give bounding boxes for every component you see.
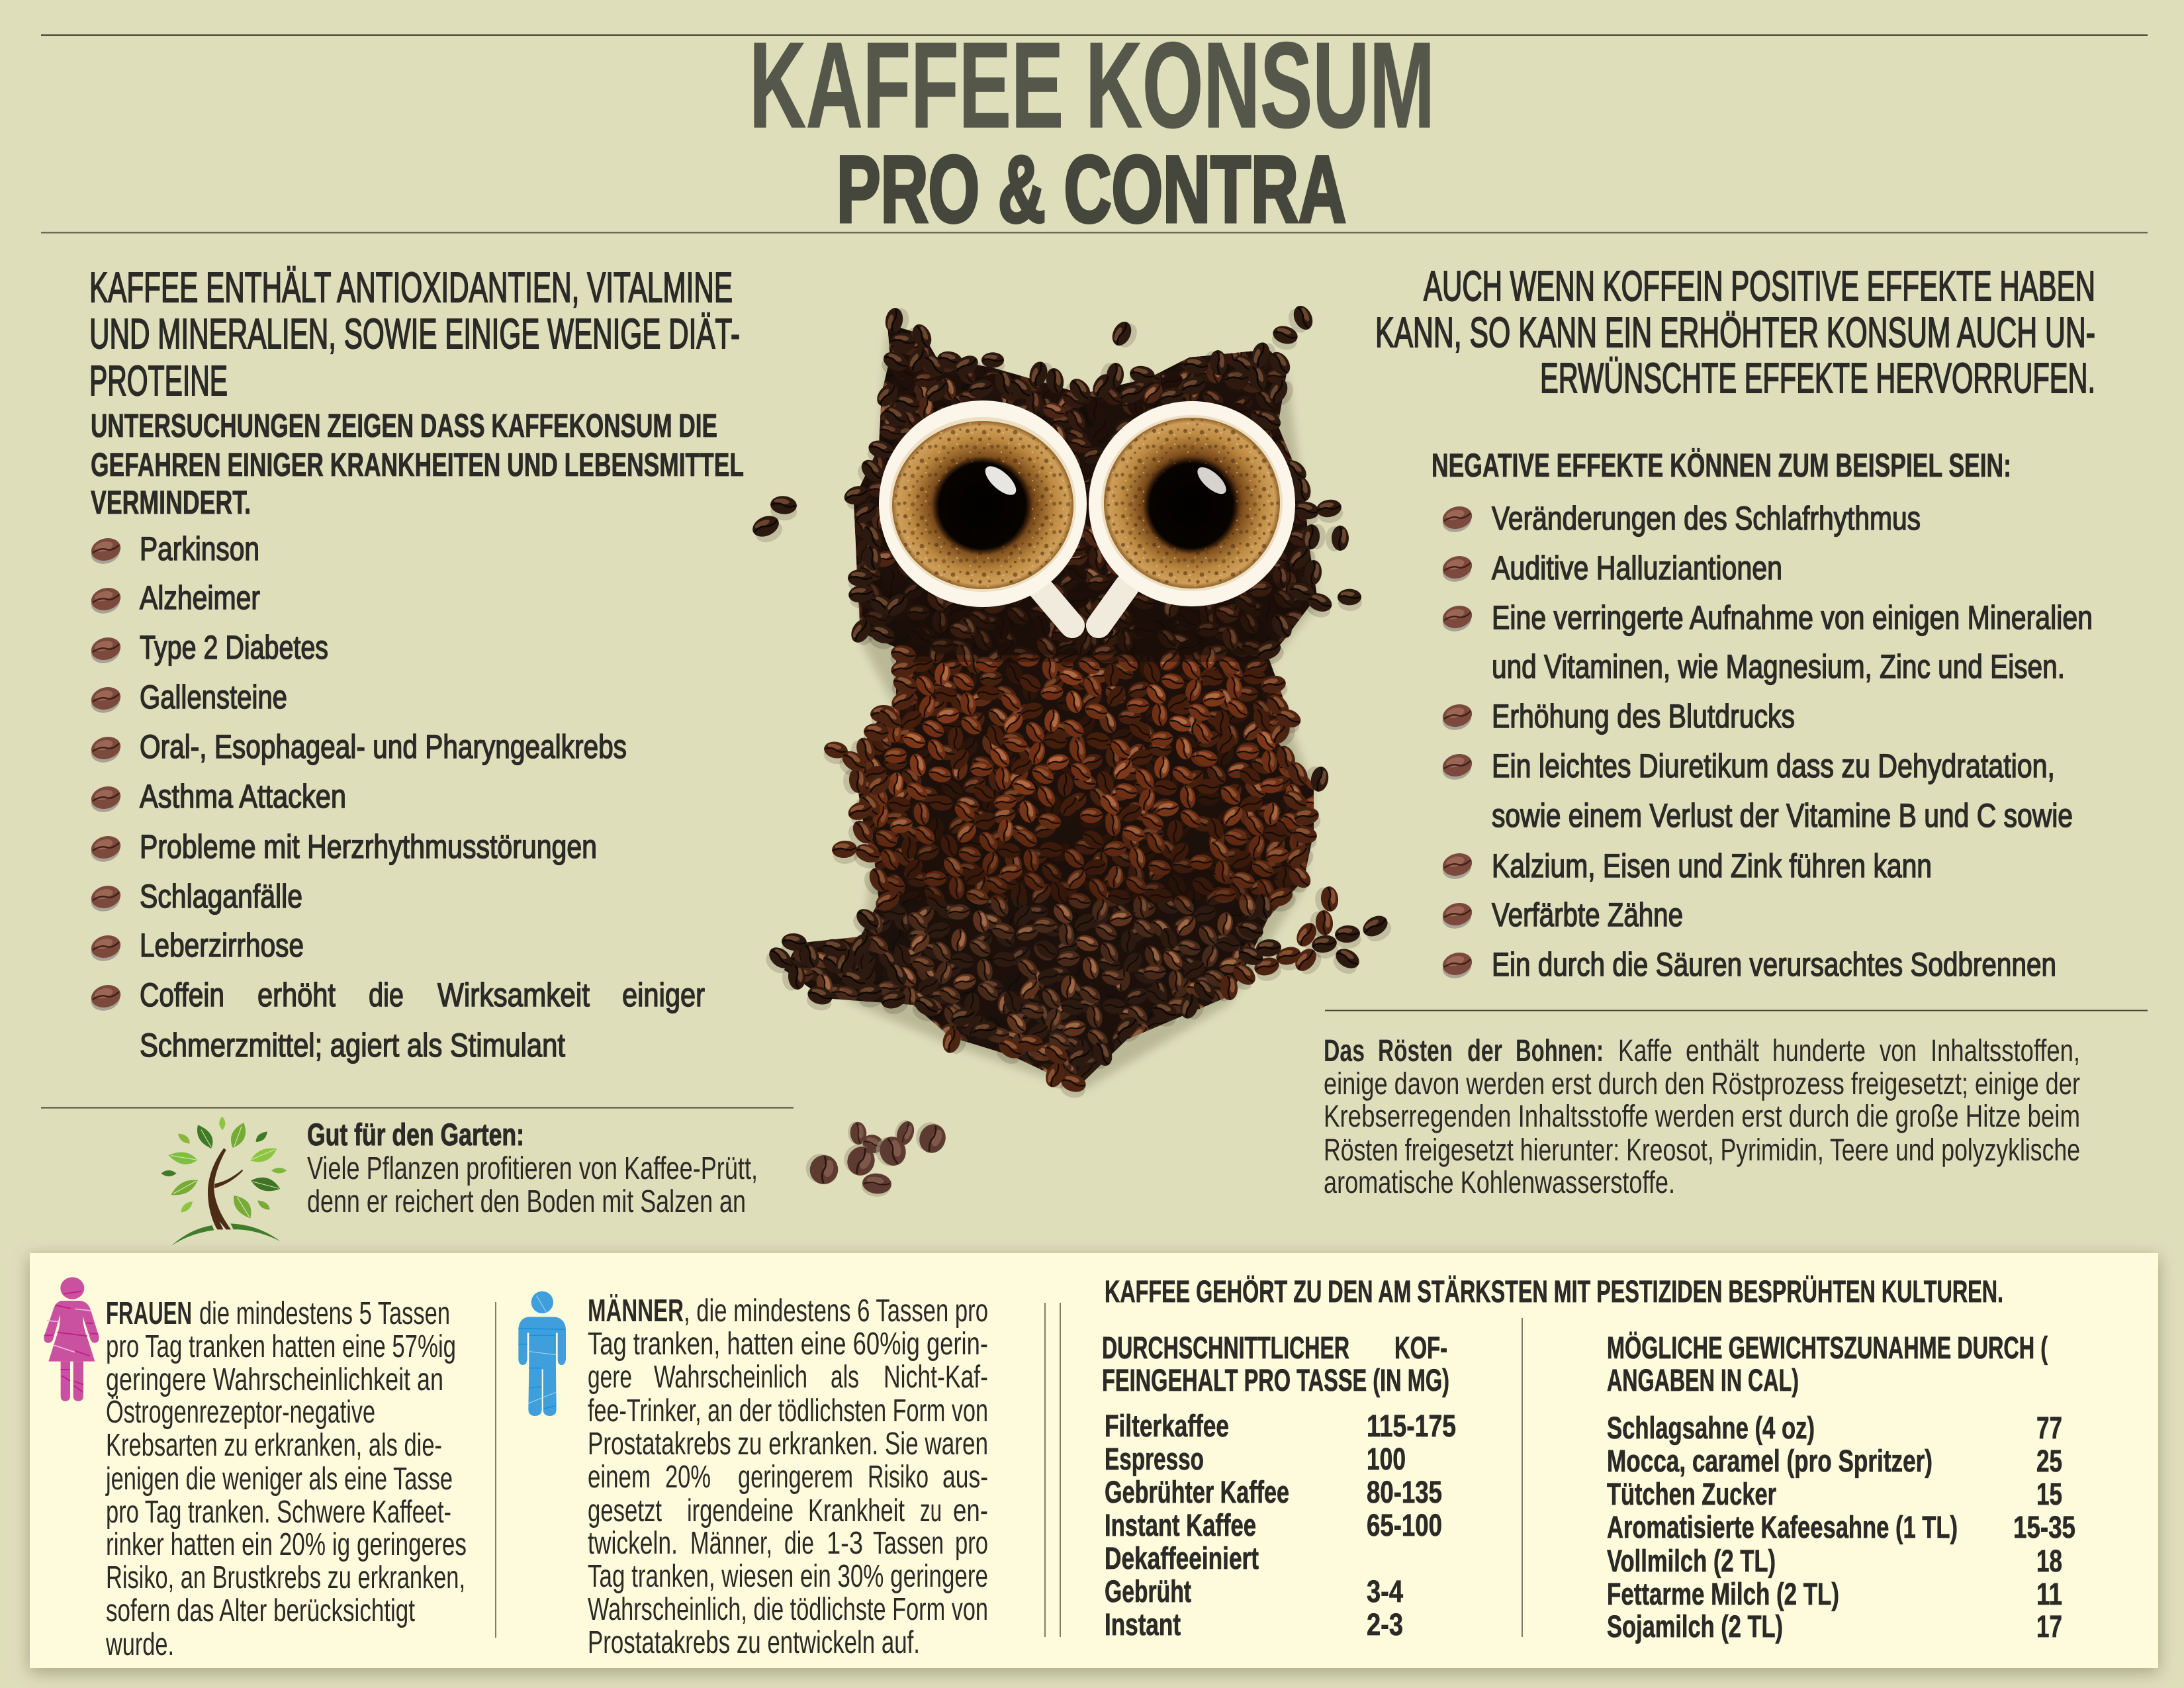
- benefits subheading: GEFAHREN EINIGER KRANKHEITEN UND LEBENSMITTEL: [91, 446, 744, 483]
- list: negative effects: sowie einem Verlust der Vitamine B und C sowie: [1492, 797, 2073, 834]
- list: negative effects: Ein durch die Säuren verursachtes Sodbrennen: [1492, 946, 2056, 983]
- table: possible weight gain: [1607, 1330, 2075, 1644]
- callout: good for the garden: denn er reichert den Boden mit Salzen an: [307, 1184, 746, 1219]
- text block: women: FRAUEN: [106, 1296, 192, 1331]
- text block: roasting the beans: Das: [1324, 1033, 1365, 1068]
- owl body mass: [784, 328, 1317, 1080]
- list: diseases reduced by coffee: erhöht: [257, 976, 336, 1013]
- list: negative effects: [1440, 500, 2093, 983]
- text block: men: Wahrscheinlich, die tödlichste Form von: [588, 1592, 988, 1627]
- text block: women: Östrogenrezeptor-negative: [106, 1395, 375, 1430]
- text block: men: Tag tranken, wiesen ein 30% geringere: [588, 1559, 988, 1594]
- left coffee cup eye: [879, 400, 1087, 607]
- text block: men: twickeln.: [588, 1526, 678, 1561]
- panel: benefits intro heading: UND MINERALIEN, SOWIE EINIGE WENIGE DIÄT-: [89, 310, 740, 357]
- text block: women: sofern das Alter berücksichtigt: [106, 1593, 415, 1628]
- text block: women: pro Tag tranken. Schwere Kaffeet-: [106, 1495, 451, 1530]
- title: PRO & CONTRA: [837, 137, 1346, 242]
- text block: men: Prostatakrebs zu erkranken. Sie waren: [588, 1427, 988, 1462]
- text block: men: 20%: [665, 1460, 711, 1495]
- table: possible weight gain: Mocca, caramel (pro Spritzer): [1607, 1443, 1933, 1478]
- list: diseases reduced by coffee: Probleme mit Herzrhythmusstörungen: [140, 828, 597, 865]
- table: caffeine content: KOF-: [1394, 1330, 1447, 1365]
- text block: women: pro Tag tranken hatten eine 57%ig: [106, 1329, 456, 1364]
- text block: men: einem: [588, 1460, 651, 1495]
- text block: men: Krankheit: [808, 1493, 905, 1528]
- table: caffeine content: 115-175: [1367, 1408, 1456, 1443]
- table: possible weight gain: Schlagsahne (4 oz): [1607, 1410, 1815, 1445]
- text block: women: jenigen die weniger als eine Tasse: [105, 1462, 453, 1497]
- table: caffeine content: FEINGEHALT PRO TASSE (IN MG): [1102, 1362, 1449, 1397]
- list: negative effects: Auditive Halluziantionen: [1492, 549, 1782, 586]
- list: diseases reduced by coffee: Oral-, Esophageal- und Pharyngealkrebs: [140, 728, 627, 765]
- text block: women: geringere Wahrscheinlichkeit an: [106, 1362, 443, 1397]
- list: diseases reduced by coffee: Gallensteine: [140, 679, 287, 716]
- text block: men: 1-3: [827, 1526, 863, 1561]
- table: possible weight gain: 11: [2036, 1576, 2062, 1611]
- text block: men: [588, 1293, 988, 1660]
- list: diseases reduced by coffee: Schlaganfälle: [140, 878, 302, 915]
- text block: men: Risiko: [868, 1460, 929, 1495]
- text block: men: gesetzt: [588, 1493, 662, 1528]
- text block: women: Risiko, an Brustkrebs zu erkranken,: [106, 1560, 465, 1595]
- list: diseases reduced by coffee: Type 2 Diabetes: [140, 629, 328, 666]
- list: diseases reduced by coffee: Parkinson: [140, 530, 259, 567]
- list: diseases reduced by coffee: die: [369, 976, 404, 1013]
- table: caffeine content: Gebrühter Kaffee: [1105, 1474, 1289, 1509]
- illustration: owl made of coffee beans and cups: [749, 303, 1396, 1100]
- icon: man: [518, 1291, 566, 1416]
- icon: cup handles: [1038, 586, 1127, 626]
- table: caffeine content: 3-4: [1367, 1573, 1403, 1609]
- text block: men: irgendeine: [687, 1493, 794, 1528]
- table: caffeine content: Instant: [1105, 1607, 1181, 1642]
- text block: roasting the beans: aromatische Kohlenwasserstoffe.: [1324, 1164, 1675, 1199]
- table: caffeine content: 80-135: [1367, 1474, 1442, 1509]
- text block: men: fee-Trinker, an der tödlichsten Form von: [588, 1393, 988, 1429]
- text block: men: als: [831, 1360, 859, 1395]
- text block: men: geringerem: [738, 1460, 853, 1495]
- list: diseases reduced by coffee: Coffein: [140, 976, 224, 1013]
- title: [749, 17, 1435, 242]
- list: negative effects: Ein leichtes Diuretikum dass zu Dehydratation,: [1492, 747, 2055, 784]
- list: diseases reduced by coffee: Leberzirrhose: [140, 927, 304, 964]
- title: KAFFEE KONSUM: [749, 17, 1435, 153]
- list: negative effects: und Vitaminen, wie Magnesium, Zinc und Eisen.: [1492, 648, 2065, 685]
- text block: men: pro: [955, 1526, 988, 1561]
- callout: good for the garden: Gut für den Garten:: [307, 1117, 524, 1152]
- list: negative effects: Verfärbte Zähne: [1492, 896, 1683, 933]
- right coffee cup eye: [1089, 401, 1295, 606]
- text block: men: , die mindestens 6 Tassen pro: [684, 1293, 988, 1329]
- benefits subheading: [91, 407, 744, 521]
- list: negative effects: Veränderungen des Schlafrhythmus: [1492, 500, 1921, 537]
- text block: roasting the beans: [1324, 1033, 2080, 1199]
- panel: benefits intro heading: KAFFEE ENTHÄLT ANTIOXIDANTIEN, VITALMINE: [89, 263, 733, 311]
- list: negative effects: Kalzium, Eisen und Zink führen kann: [1492, 847, 1932, 884]
- text block: roasting the beans: Bohnen:: [1516, 1033, 1604, 1068]
- table: possible weight gain: 18: [2036, 1543, 2062, 1578]
- table: possible weight gain: Tütchen Zucker: [1607, 1476, 1776, 1511]
- list: diseases reduced by coffee: einiger: [622, 976, 705, 1013]
- text block: roasting the beans: Inhaltsstoffen,: [1931, 1033, 2080, 1068]
- table: possible weight gain: Sojamilch (2 TL): [1607, 1609, 1783, 1644]
- table: possible weight gain: ANGABEN IN CAL): [1607, 1362, 1799, 1397]
- text block: roasting the beans: der: [1467, 1033, 1502, 1068]
- text block: roasting the beans: Rösten: [1378, 1033, 1453, 1068]
- text block: women: wurde.: [105, 1627, 174, 1662]
- text block: roasting the beans: Kaffe: [1618, 1033, 1672, 1068]
- list: diseases reduced by coffee: Asthma Attacken: [140, 778, 346, 815]
- list: diseases reduced by coffee: Wirksamkeit: [437, 976, 590, 1013]
- table: caffeine content: 2-3: [1367, 1607, 1403, 1642]
- panel: bottom facts: [30, 1253, 2158, 1668]
- callout: good for the garden: Viele Pflanzen profitieren von Kaffee-Prütt,: [307, 1151, 758, 1186]
- panel: benefits intro heading: PROTEINE: [89, 357, 228, 404]
- table: possible weight gain: 15: [2036, 1476, 2062, 1511]
- table: possible weight gain: 17: [2036, 1609, 2062, 1644]
- benefits subheading: UNTERSUCHUNGEN ZEIGEN DASS KAFFEKONSUM DIE: [91, 407, 717, 444]
- table: caffeine content: [1102, 1330, 1456, 1642]
- table: possible weight gain: Vollmilch (2 TL): [1607, 1543, 1776, 1578]
- text block: men: Tag tranken, hatten eine 60%ig gerin-: [588, 1327, 988, 1362]
- text block: roasting the beans: hunderte: [1772, 1033, 1866, 1068]
- scattered edge beans: [749, 303, 1395, 1100]
- list: diseases reduced by coffee: Alzheimer: [140, 579, 260, 616]
- table: caffeine content: DURCHSCHNITTLICHER: [1102, 1330, 1349, 1365]
- text block: men: Nicht-Kaf-: [884, 1360, 988, 1395]
- table: possible weight gain: 77: [2036, 1410, 2062, 1445]
- table: caffeine content: 100: [1367, 1441, 1406, 1476]
- table: possible weight gain: Fettarme Milch (2 TL): [1607, 1576, 1839, 1611]
- table: caffeine content: Espresso: [1105, 1441, 1204, 1476]
- text block: men: Tassen: [873, 1526, 944, 1561]
- text block: men: MÄNNER: [588, 1293, 684, 1329]
- icon: woman: [44, 1277, 99, 1401]
- icon: small coffee beans: [803, 1117, 950, 1198]
- panel: benefits intro heading: [89, 263, 740, 404]
- text block: women: Krebsarten zu erkranken, als die-: [106, 1428, 442, 1463]
- text block: men: gere: [588, 1360, 632, 1395]
- table: caffeine content: Dekaffeeiniert: [1105, 1540, 1259, 1575]
- icon: tree: [161, 1117, 287, 1246]
- callout: good for the garden: [307, 1117, 758, 1219]
- text block: men: aus-: [942, 1460, 988, 1495]
- text block: men: die: [784, 1526, 814, 1561]
- text block: roasting the beans: enthält: [1686, 1033, 1759, 1068]
- text block: women: rinker hatten ein 20% ig geringeres: [106, 1527, 467, 1562]
- list: diseases reduced by coffee: Schmerzmittel; agiert als Stimulant: [140, 1027, 565, 1064]
- text block: men: zu: [920, 1493, 942, 1528]
- panel: negative effects heading: [1375, 262, 2095, 402]
- text block: men: Wahrscheinlich: [654, 1360, 807, 1395]
- text block: roasting the beans: von: [1880, 1033, 1917, 1068]
- text block: women: [105, 1296, 467, 1662]
- table: caffeine content: Filterkaffee: [1105, 1408, 1229, 1443]
- table: caffeine content: Gebrüht: [1105, 1573, 1191, 1609]
- list: diseases reduced by coffee: [89, 530, 705, 1064]
- table: possible weight gain: 15-35: [2013, 1509, 2075, 1544]
- text block: men: Männer,: [690, 1526, 772, 1561]
- table: possible weight gain: Aromatisierte Kafeesahne (1 TL): [1607, 1509, 1958, 1544]
- text block: men: Prostatakrebs zu entwickeln auf.: [588, 1625, 920, 1660]
- benefits subheading: VERMINDERT.: [91, 484, 251, 521]
- table: caffeine content: Instant Kaffee: [1105, 1507, 1256, 1542]
- text block: men: en-: [953, 1493, 988, 1528]
- table: caffeine content: 65-100: [1367, 1507, 1442, 1542]
- text block: women: die mindestens 5 Tassen: [199, 1296, 450, 1331]
- list: negative effects: Erhöhung des Blutdrucks: [1492, 698, 1795, 735]
- table: possible weight gain: 25: [2036, 1443, 2062, 1478]
